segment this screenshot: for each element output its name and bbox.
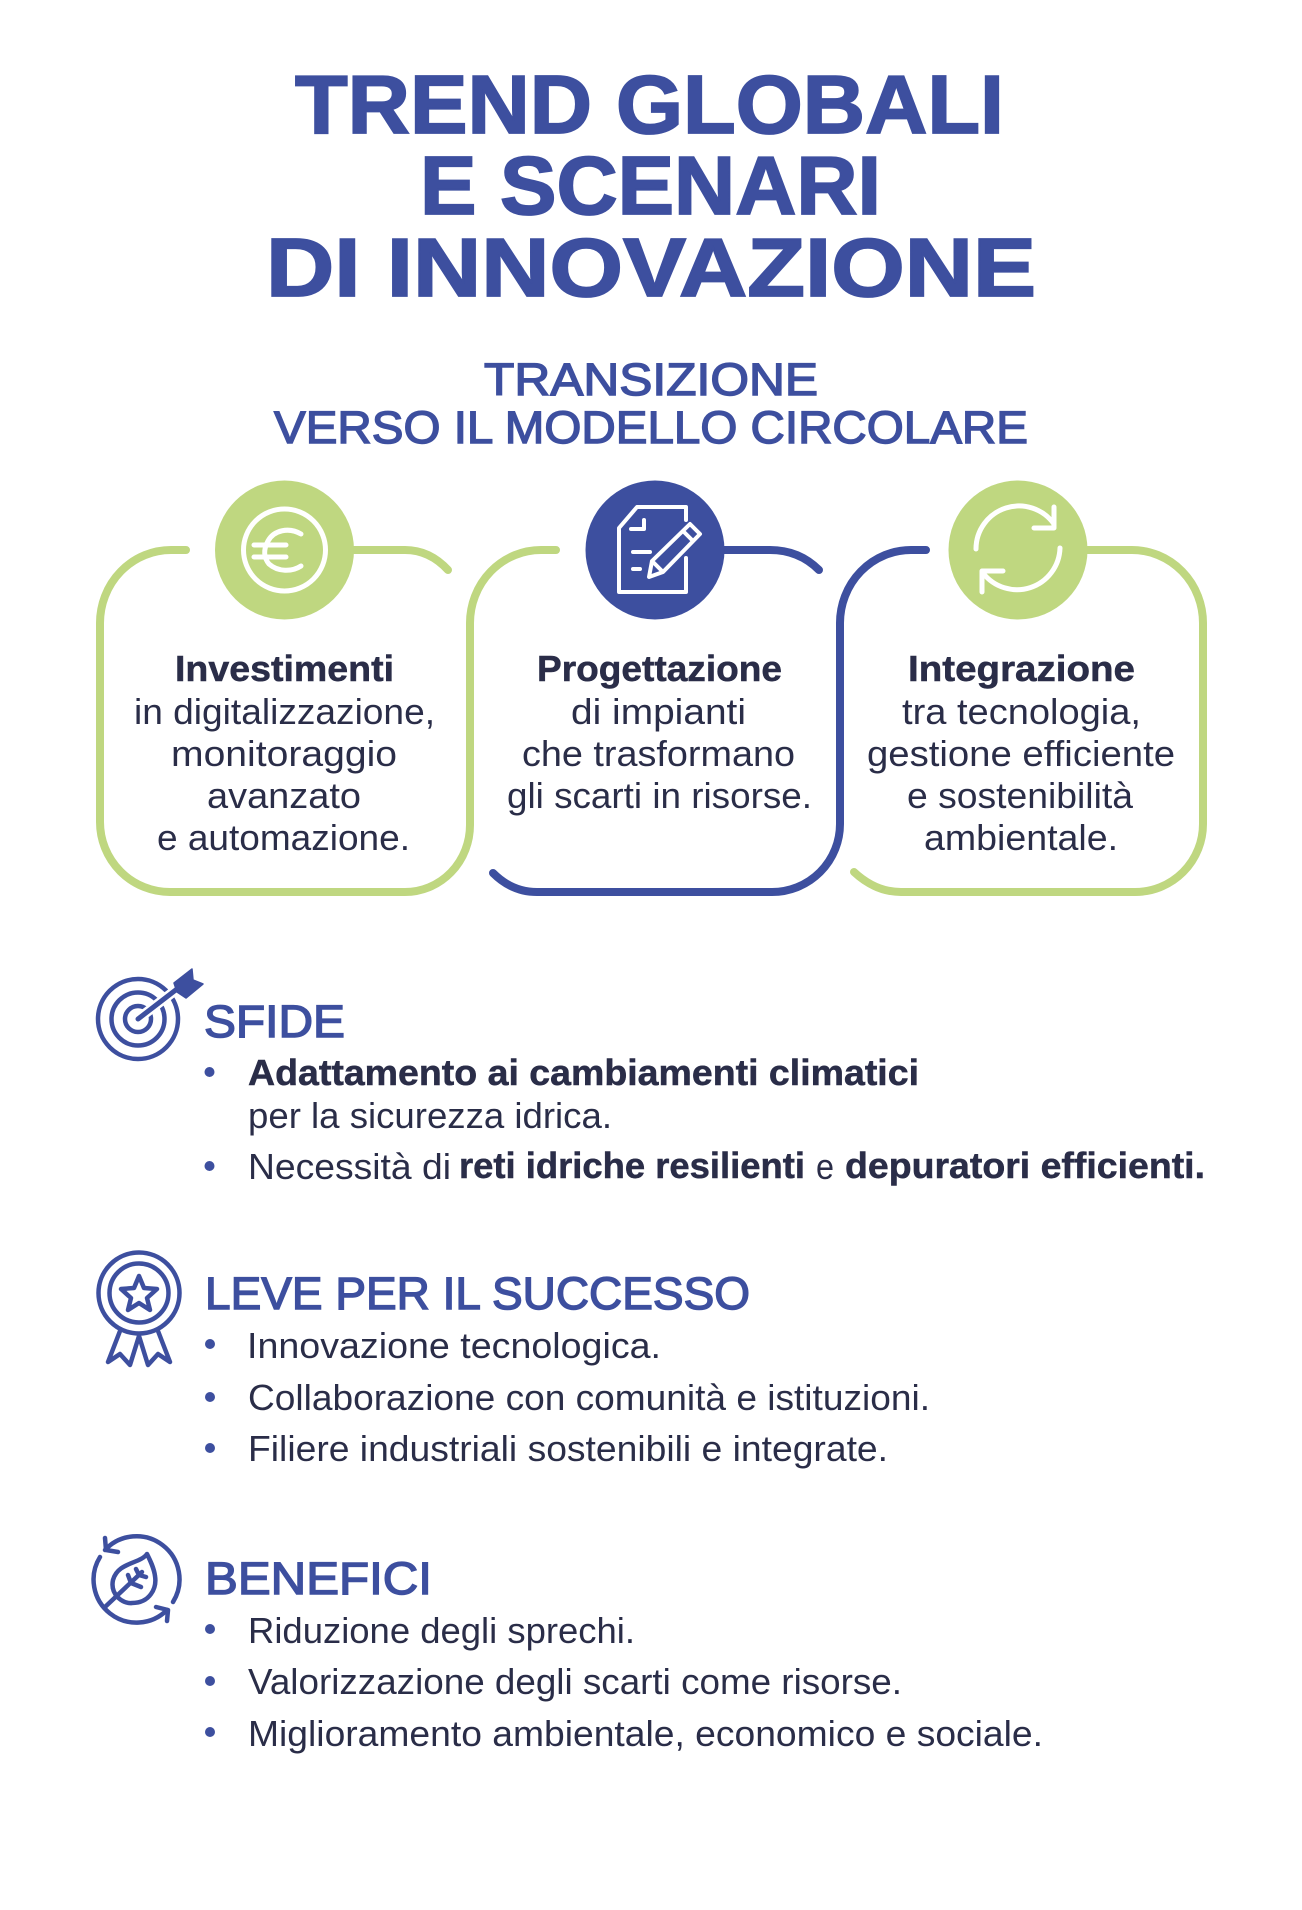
text block: Investimenti: avanzato [207, 775, 361, 816]
list: leve: Collaborazione con comunità e istituzioni. [248, 1377, 930, 1418]
list: sfide: reti idriche resilienti [459, 1145, 805, 1186]
icon: target with arrow [98, 969, 203, 1059]
text block: Integrazione [867, 648, 1175, 858]
text block: Investimenti: in digitalizzazione, [134, 691, 435, 732]
heading: BENEFICI: BENEFICI [205, 1553, 432, 1604]
list: sfide [204, 1052, 1205, 1187]
heading: LEVE PER IL SUCCESSO: LEVE PER IL SUCCESSO [205, 1268, 750, 1319]
text block: Integrazione: tra tecnologia, [902, 691, 1141, 732]
list: sfide: Adattamento ai cambiamenti climatici [248, 1052, 919, 1093]
list: sfide: depuratori efficienti. [845, 1145, 1205, 1186]
list: sfide: Necessità di [248, 1146, 451, 1187]
text block: Investimenti: Investimenti [175, 648, 394, 689]
text block: Integrazione: e sostenibilità [907, 775, 1134, 816]
list: benefici: Valorizzazione degli scarti come risorse. [248, 1661, 902, 1702]
panel: three linked cards [100, 480, 1203, 892]
text block: Investimenti: monitoraggio [171, 733, 397, 774]
panel: leve per il successo [98, 1252, 930, 1469]
icon: medal with star [98, 1252, 180, 1365]
card outline: green right [854, 550, 1203, 892]
icon: euro coin [215, 480, 354, 620]
icon: document and pencil [586, 480, 724, 620]
list: leve: Innovazione tecnologica. [247, 1325, 661, 1366]
list: benefici: Riduzione degli sprechi. [248, 1610, 635, 1651]
card outline: green left [100, 550, 556, 892]
text block: Investimenti [134, 648, 435, 858]
text block: Integrazione: ambientale. [924, 817, 1118, 858]
text block: Progettazione: di impianti [571, 691, 746, 732]
text block: Progettazione [507, 648, 812, 816]
title: TREND GLOBALI [295, 58, 1004, 151]
title [266, 58, 1036, 314]
text block: Progettazione: che trasformano [522, 733, 795, 774]
card outline: blue top connector [715, 550, 819, 570]
title: E SCENARI [420, 139, 881, 232]
icon: refresh arrows [948, 480, 1088, 620]
text block: Integrazione: Integrazione [908, 648, 1135, 689]
icon: leaf in circular arrows [94, 1536, 179, 1623]
text block: Progettazione: Progettazione [537, 648, 782, 689]
title: DI INNOVAZIONE [266, 221, 1036, 314]
text block: Investimenti: e automazione. [157, 817, 410, 858]
heading: SFIDE: SFIDE [204, 996, 345, 1047]
list: leve: Filiere industriali sostenibili e integrate. [248, 1428, 888, 1469]
card outline: green top connector [345, 550, 448, 570]
list: sfide: per la sicurezza idrica. [248, 1095, 612, 1136]
subtitle [274, 354, 1028, 453]
list: benefici [205, 1610, 1043, 1754]
list: sfide: e [816, 1146, 834, 1187]
list: leve [205, 1325, 930, 1469]
text block: Integrazione: gestione efficiente [867, 733, 1175, 774]
subtitle: VERSO IL MODELLO CIRCOLARE [274, 402, 1028, 453]
panel: benefici [94, 1536, 1043, 1754]
panel: sfide [98, 969, 1205, 1187]
text block: Progettazione: gli scarti in risorse. [507, 775, 812, 816]
subtitle: TRANSIZIONE [484, 354, 818, 405]
list: benefici: Miglioramento ambientale, economico e sociale. [248, 1713, 1043, 1754]
card outline: blue [493, 550, 926, 892]
